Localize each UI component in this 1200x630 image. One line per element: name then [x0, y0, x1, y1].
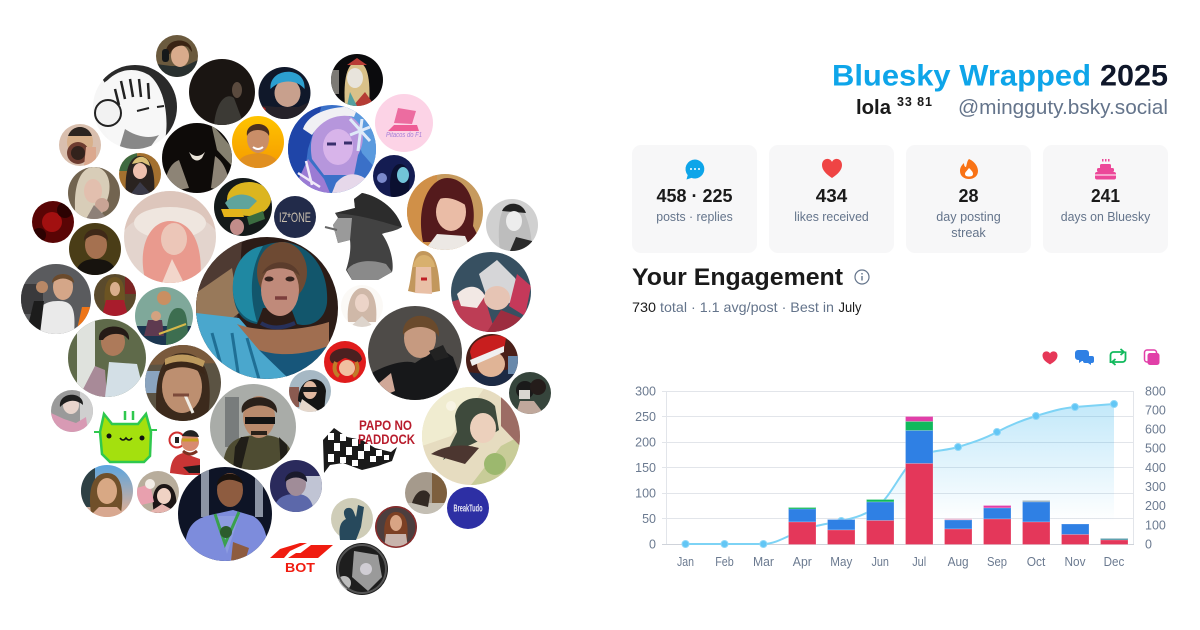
month axis: Jan: [677, 555, 694, 569]
avatar: black and white noise: [336, 543, 388, 595]
month axis: Nov: [1064, 555, 1086, 569]
avatar: manga line art: [93, 65, 177, 149]
avatar: Papo no Paddock logo: [323, 418, 415, 473]
month axis: Feb: [715, 555, 734, 569]
title: Bluesky Wrapped: [832, 60, 1091, 92]
left axis: 200: [635, 436, 656, 450]
panel: posts and replies: 458 · 225: [656, 186, 732, 206]
display name: [856, 95, 932, 119]
icon: replies legend: [1075, 350, 1094, 365]
label: day posting streak: day posting: [936, 209, 1001, 224]
avatar: IZ*ONE logo: [274, 196, 316, 238]
right axis: 300: [1145, 480, 1166, 494]
avatar: man with backpack: [21, 264, 92, 334]
panel: likes received: 434: [816, 186, 847, 206]
avatar: teal-haired woman large portrait: [196, 237, 338, 379]
avatar: illustrated group: [135, 287, 193, 346]
avatar: girl with pink toy: [137, 471, 179, 513]
right axis: 500: [1145, 442, 1166, 456]
avatar: man with dark sunglasses: [210, 384, 296, 470]
bar: Jun: [866, 500, 894, 544]
left axis: 150: [635, 461, 656, 475]
avatar: anime winter character: [451, 252, 531, 332]
avatar: anime girl with flowers: [422, 387, 520, 485]
month axis: [677, 555, 1124, 569]
panel: day posting streak: 28: [958, 186, 978, 206]
engagement summary: total · 1.1 avg/post · Best in: [660, 299, 834, 315]
chart legend: [1042, 349, 1160, 365]
panel: posts and replies: [632, 145, 757, 253]
label: day posting streak: streak: [951, 225, 986, 240]
avatar: pale glowing figure: [162, 123, 232, 193]
bar: Nov: [1062, 524, 1089, 544]
icon: cake: [1095, 159, 1116, 180]
heading: your engagement: Your Engagement: [632, 264, 843, 291]
avatar: selfie with cigarette: [145, 345, 221, 421]
label: day posting streak: [936, 209, 1001, 240]
avatar: pink shirt black and white: [51, 390, 93, 432]
month axis: Mar: [753, 555, 774, 569]
avatar: cartoon blonde: [119, 153, 161, 195]
month axis: Sep: [987, 555, 1007, 569]
panel: day posting streak: [906, 145, 1031, 253]
avatar: yellow racing helmet: [214, 178, 272, 236]
icon: info: [855, 270, 869, 284]
avatar: platinum blonde: [68, 167, 120, 219]
avatar: green pixel cat: [94, 411, 157, 462]
panel: likes received: likes received: [794, 209, 869, 224]
avatar: room portrait: [405, 472, 447, 514]
right axis: [1145, 384, 1166, 552]
avatar: red cartoon girl: [324, 341, 366, 383]
month axis: Jun: [871, 555, 889, 569]
avatar: baby in santa hat: [466, 334, 518, 386]
bar: Oct: [1022, 500, 1050, 544]
month axis: Apr: [793, 555, 812, 569]
avatar: man in periwinkle blazer: [178, 467, 272, 561]
avatar: man in white shirt: [68, 319, 146, 397]
left axis: 0: [649, 538, 656, 552]
month axis: Aug: [948, 555, 969, 569]
avatar: woman with red ring: [375, 506, 417, 548]
right axis: 200: [1145, 499, 1166, 513]
engagement summary: July: [838, 299, 862, 315]
bar: Apr: [788, 508, 816, 544]
icon: heart: [822, 159, 842, 178]
avatar: pale blonde portrait: [341, 285, 383, 327]
right axis: 100: [1145, 518, 1166, 532]
bar: Dec: [1100, 538, 1128, 544]
bar: May: [828, 520, 855, 544]
right axis: 700: [1145, 404, 1166, 418]
avatar: silhouette on beige: [331, 498, 373, 540]
avatar: Papo no Paddock logo: PADDOCK: [358, 432, 415, 447]
right axis: 0: [1145, 538, 1152, 552]
panel: likes received: [769, 145, 894, 253]
stacked bars: [788, 416, 1128, 544]
icon: speech bubble: [685, 159, 704, 180]
avatar: small blue portrait: [373, 155, 415, 197]
title: 2025: [1100, 60, 1168, 92]
avatar: man blue tint: [270, 460, 322, 512]
icon: flame: [960, 159, 978, 179]
avatar: profile with cap, grayscale: [325, 193, 402, 280]
avatar cloud: [21, 35, 551, 595]
avatar: woman at sunset: [81, 465, 133, 517]
grid lines: [662, 391, 1134, 544]
display name: lola: [856, 97, 892, 119]
avatar: cartoon with no-sign: [170, 430, 200, 475]
avatar: pink F1 flag logo: Pitacos do F1: [386, 132, 422, 139]
bar: Jul: [906, 416, 933, 544]
left axis: [635, 384, 656, 552]
month axis: May: [830, 555, 853, 569]
avatar: man in black jacket: [368, 306, 462, 400]
bar: Aug: [944, 518, 972, 544]
avatar: orange cartoon man: [232, 116, 284, 168]
avatar: girl with mug: [59, 124, 101, 166]
right axis: 400: [1145, 461, 1166, 475]
right axis: 600: [1145, 422, 1166, 436]
avatar: F1 BOT logo: [270, 543, 333, 575]
month axis: Jul: [912, 555, 926, 569]
avatar: Papo no Paddock logo: PAPO NO: [359, 418, 412, 433]
month axis: Oct: [1027, 555, 1046, 569]
icon: reposts legend: [1110, 349, 1126, 365]
avatar: dark hair figure: [189, 59, 255, 125]
panel: days on Bluesky: days on Bluesky: [1061, 209, 1151, 224]
left axis: 250: [635, 410, 656, 424]
panel: posts and replies: posts · replies: [656, 209, 733, 224]
month axis: Dec: [1104, 555, 1124, 569]
panel: days on Bluesky: 241: [1091, 186, 1120, 206]
avatar: black and white girl: [486, 199, 538, 251]
avatar: dark red abstract: [32, 201, 74, 243]
avatar: pink hair with hat: [124, 191, 216, 283]
avatar: BreakTudo logo: BreakTudo: [454, 504, 482, 514]
avatar: red dress: [94, 274, 136, 316]
avatar: masked pair: [509, 372, 551, 414]
avatar: red hair woman: [407, 174, 483, 250]
panel: days on Bluesky: [1043, 145, 1168, 253]
avatar: cartoon with horns: [331, 54, 383, 106]
avatar: pink F1 flag logo: [375, 94, 433, 152]
avatar: F1 BOT logo: BOT: [285, 560, 315, 575]
avatar: man in dark light: [69, 223, 121, 275]
right axis: 800: [1145, 384, 1166, 398]
avatar: racing headset boy: [156, 35, 198, 77]
chart: monthly engagement: [635, 384, 1166, 569]
left axis: 100: [635, 486, 656, 500]
bar: Sep: [984, 506, 1011, 544]
avatar: BreakTudo logo: [447, 487, 489, 529]
handle: @mingguty.bsky.social: [958, 97, 1168, 119]
display name: 33 81: [897, 95, 932, 109]
icon: quotes legend: [1144, 350, 1160, 365]
avatar: girl in sunglasses: [289, 370, 331, 412]
engagement summary: 730: [632, 299, 656, 315]
left axis: 50: [642, 512, 656, 526]
left axis: 300: [635, 384, 656, 398]
cumulative area line: [682, 400, 1118, 548]
avatar: blue hair smiling: [258, 66, 312, 120]
avatar: blonde sim figure: [408, 251, 440, 294]
avatar: IZ*ONE logo: IZ*ONE: [279, 209, 311, 225]
avatar: purple illustrated elf: [288, 105, 376, 193]
icon: likes legend: [1042, 351, 1058, 364]
